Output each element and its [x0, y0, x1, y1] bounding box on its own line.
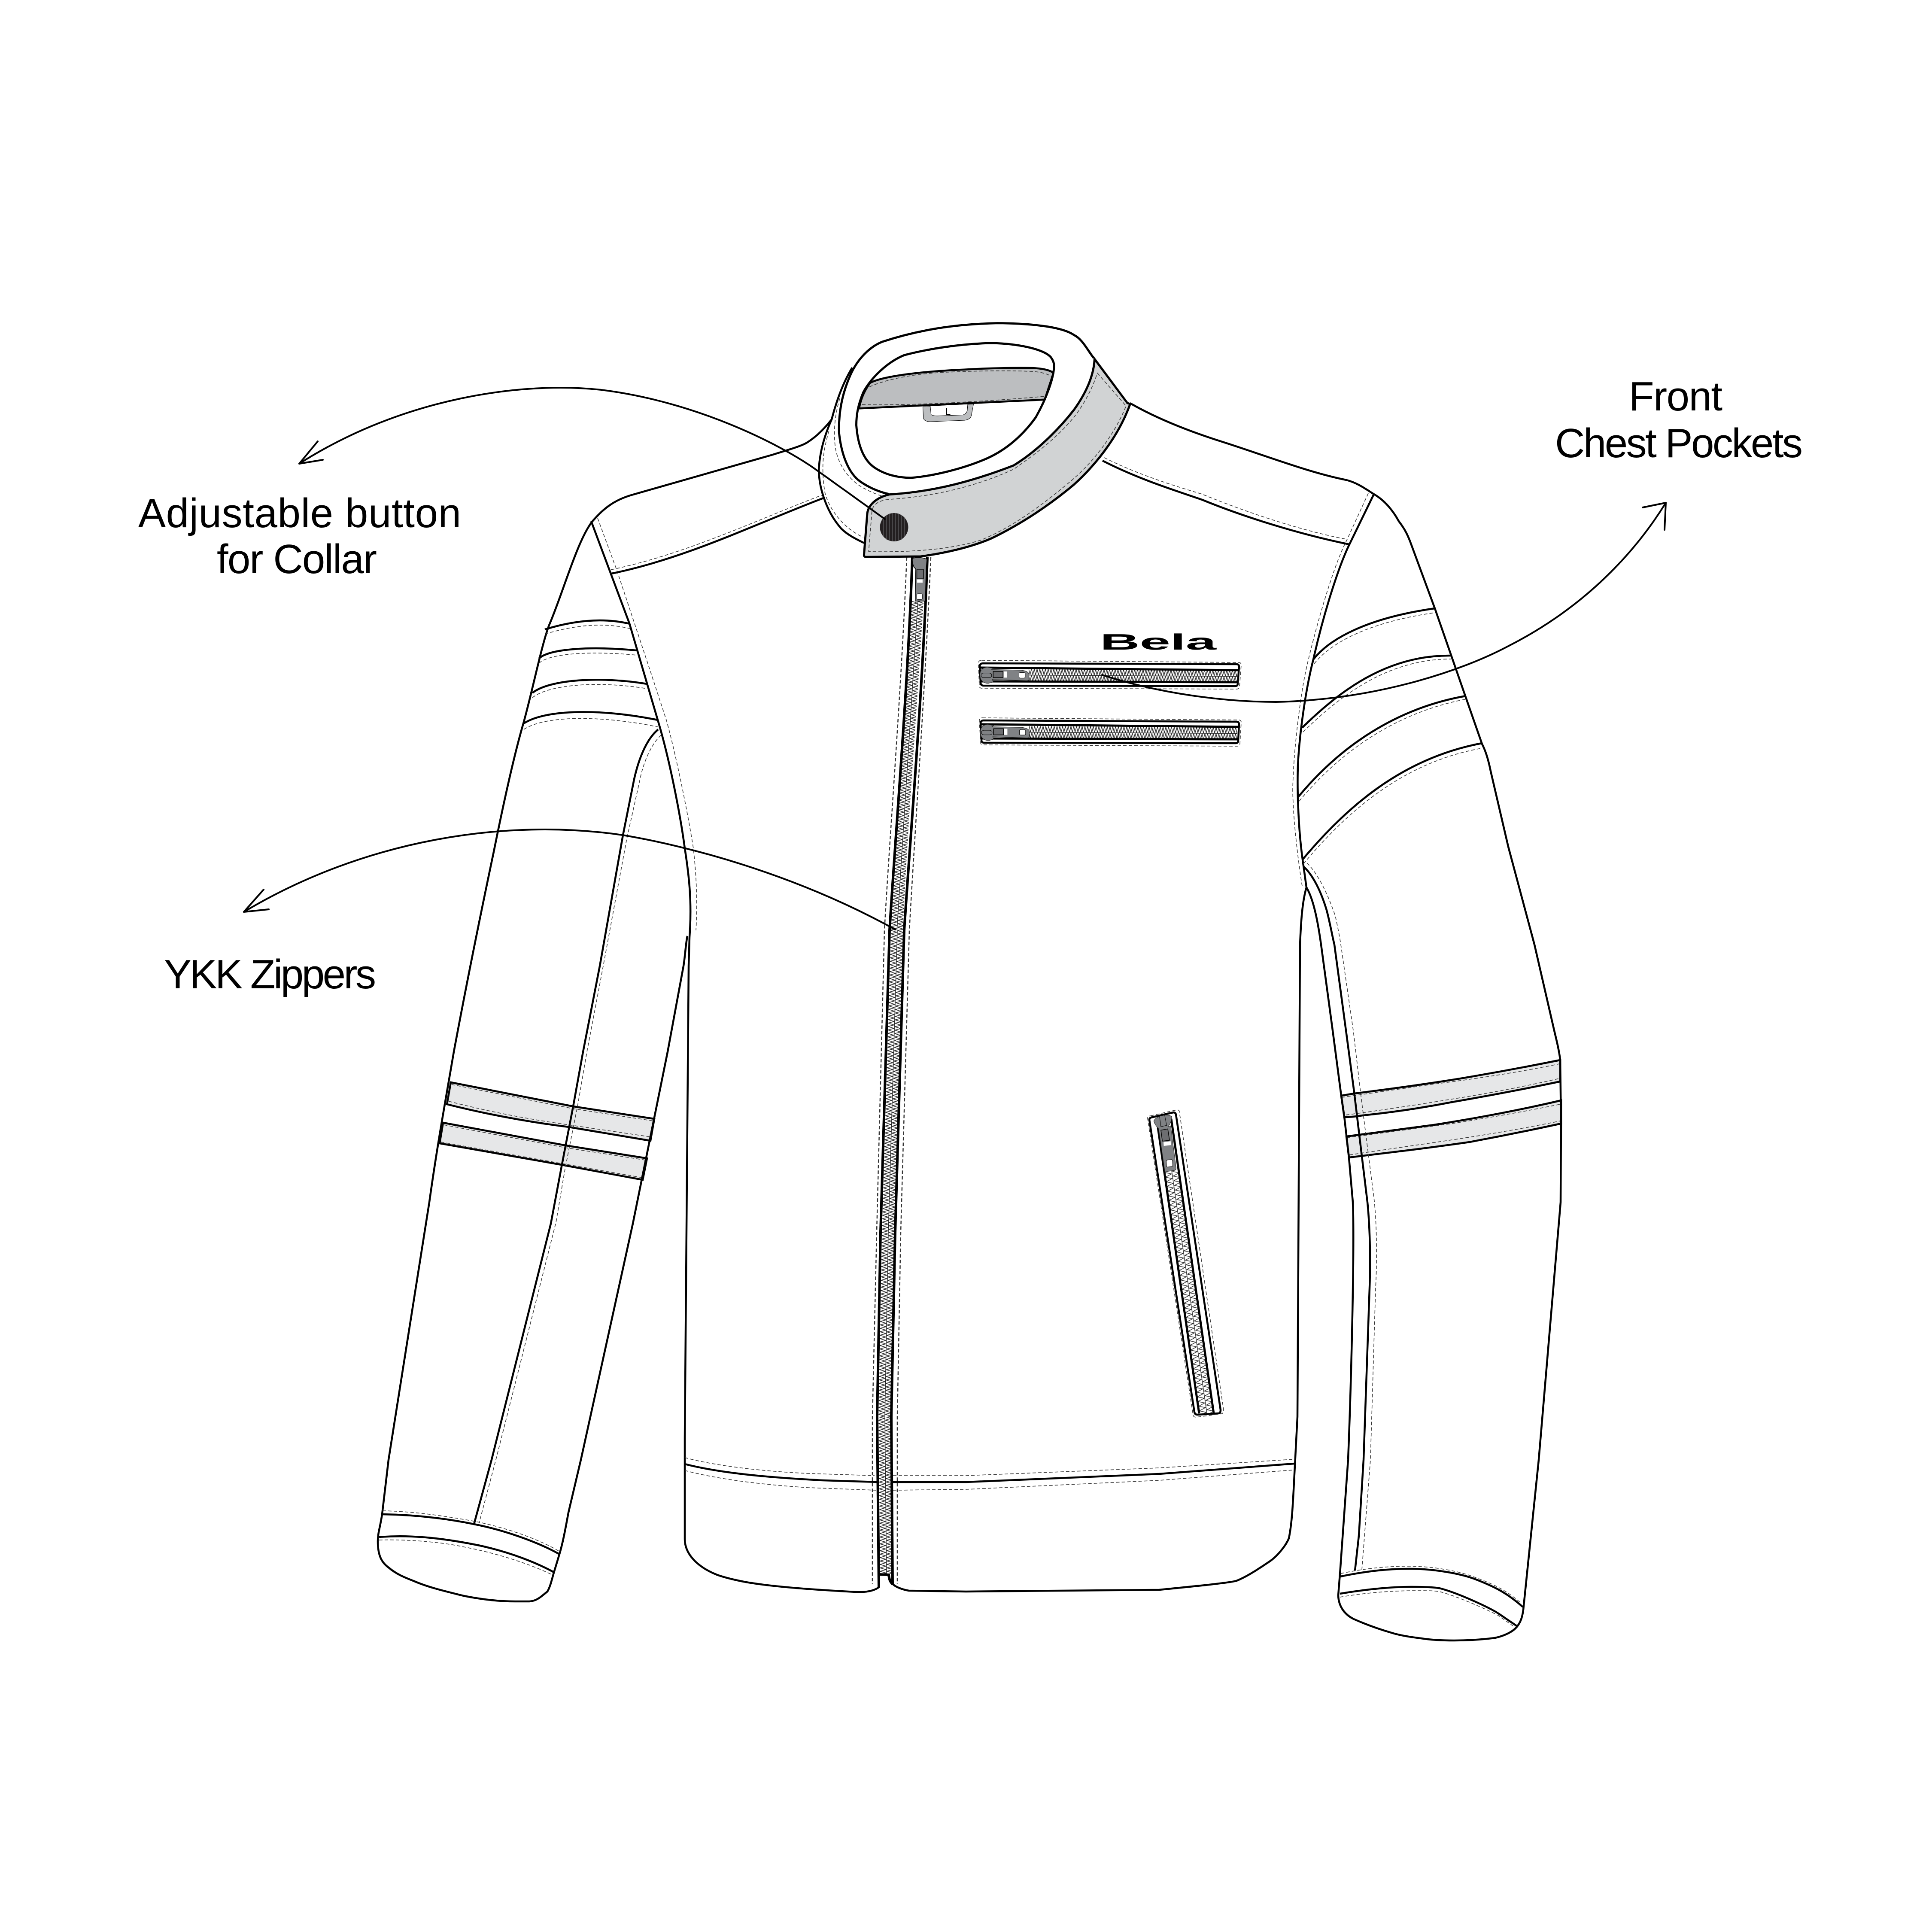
neck label size letter: L: [945, 406, 951, 417]
label: YKK zippers: YKK Zippers: [164, 951, 376, 997]
right yoke seam: [1103, 461, 1349, 544]
jacket drawing: [378, 323, 1561, 1640]
right underarm seam: [1303, 866, 1370, 1571]
right body side and hem: [892, 887, 1306, 1592]
label: adjustable button for collar: Adjustable button: [138, 490, 461, 536]
hand pocket zipper: [1148, 1110, 1224, 1417]
label: adjustable button for collar: [138, 490, 461, 582]
left armhole seam and body side: [591, 521, 879, 1592]
label: front chest pockets: Front: [1629, 374, 1722, 419]
main front zipper: [872, 557, 931, 1587]
label: adjustable button for collar: for Collar: [217, 536, 377, 582]
collar underside flap: [819, 368, 882, 543]
neck opening: [857, 343, 1054, 478]
left cuff: [379, 1511, 559, 1575]
collar back lining: [859, 368, 1054, 408]
right sleeve reflective bands: [1341, 1060, 1561, 1157]
grey collar band: [864, 359, 1130, 557]
left sleeve outline: [378, 419, 832, 1601]
label: front chest pockets: Chest Pockets: [1555, 420, 1803, 466]
main zipper slider: [912, 558, 927, 601]
arrow: front chest pockets: [1102, 503, 1666, 702]
right shoulder stripes: [1298, 608, 1482, 864]
right armhole seam: [1297, 494, 1374, 887]
left sleeve reflective bands: [440, 1082, 654, 1180]
collar ring outline: [839, 323, 1094, 494]
right shoulder and sleeve outline: [1130, 403, 1561, 1640]
collar: [819, 323, 1130, 557]
left armhole stitching: [598, 518, 697, 930]
arrow: adjustable button for collar: [299, 388, 885, 519]
inner neck label: [923, 404, 974, 422]
waistband seam and stitching: [685, 1458, 1294, 1490]
arrow: YKK zippers: [244, 829, 895, 930]
Bela logo: Bela: [1100, 630, 1218, 655]
collar button: [880, 513, 908, 541]
left inner sleeve seam: [474, 729, 658, 1524]
left yoke seam: [611, 498, 823, 574]
label: front chest pockets: [1555, 374, 1803, 466]
upper chest pocket zipper: [978, 660, 1241, 689]
lower chest pocket zipper: [979, 718, 1241, 746]
right cuff: [1340, 1566, 1523, 1626]
left shoulder stripes: [524, 620, 658, 729]
